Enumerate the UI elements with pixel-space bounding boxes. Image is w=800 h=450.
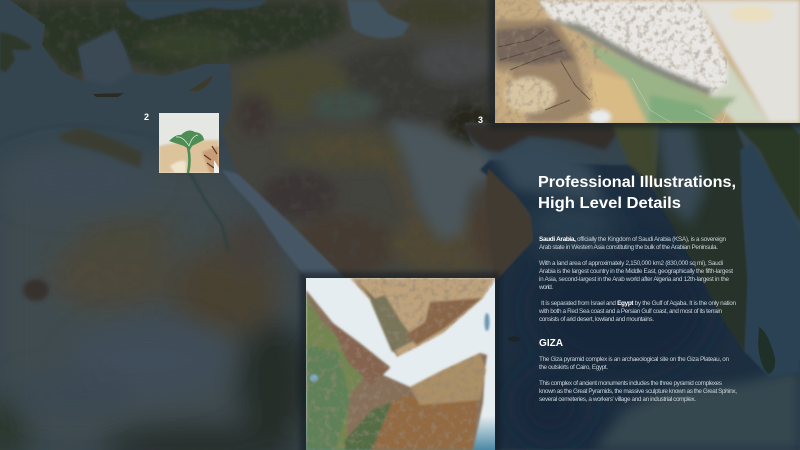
Indus olive region [612, 124, 662, 190]
text block: Saudi Arabia: consists of arid desert, lowland and mountains. [539, 316, 654, 323]
Socotra [508, 336, 520, 342]
text block: Saudi Arabia: It is separated from Israel and Egypt by the Gulf of Aqaba. It is the only nation [541, 300, 736, 307]
text block: Giza: the outskirts of Cairo, Egypt. [539, 364, 608, 371]
Cyprus [192, 77, 212, 90]
Black Sea [125, 0, 266, 20]
Sri Lanka [758, 327, 775, 374]
Arabian Sea [480, 160, 800, 450]
text block: Saudi Arabia: world. [538, 284, 553, 291]
Pakistan coast [462, 124, 625, 152]
Red Sea [222, 170, 345, 278]
Africa landmass with cloud cover [0, 150, 315, 450]
Nile valley [190, 173, 228, 250]
panel 3: Himalaya and Indus detail [489, 0, 800, 128]
text block: Giza: known as the Great Pyramids, the massive sculpture known as the Great Sphinx, [539, 388, 737, 395]
text block: Saudi Arabia: in Asia, second-largest in the Arab world after Algeria and 12th-largest in the [539, 276, 729, 283]
text block: Giza: This complex of ancient monuments includes the three pyramid complexes [539, 380, 722, 387]
Aegean and eastern Mediterranean [78, 30, 132, 85]
text block: Giza: The Giza pyramid complex is an archaeological site on the Giza Plateau, on [539, 356, 729, 363]
Bengal land [735, 124, 800, 222]
title: High Level Details [538, 195, 681, 212]
Gulf of Oman [490, 140, 605, 205]
panel 1: Gulf of Aden detail [300, 272, 500, 450]
text block: Giza: several cemeteries, a workers' village and an industrial complex. [539, 396, 696, 403]
rocky massif [23, 279, 49, 301]
text block: Saudi Arabia: Saudi Arabia, officially the Kingdom of Saudi Arabia (KSA), is a sovereign [539, 236, 726, 243]
text block: Giza [539, 356, 737, 403]
label: panel number 2: 2 [144, 112, 149, 122]
Crete [93, 93, 124, 97]
text block: Saudi Arabia: with both a Red Sea coast and a Persian Gulf coast, and most of its terrain [538, 308, 722, 315]
Middle East land [10, 0, 495, 278]
text block: Saudi Arabia [538, 236, 736, 323]
heading: Giza: GIZA [539, 338, 563, 349]
text block: Saudi Arabia: With a land area of approximately 2,150,000 km2 (830,000 sq mi), Saudi [539, 260, 723, 267]
cloud over Africa [5, 152, 228, 417]
Oman coast [485, 168, 533, 282]
Italy [0, 32, 32, 72]
rock texture on Sahara [30, 205, 310, 330]
Libyan coast [58, 128, 142, 168]
Indian peninsula [655, 124, 748, 352]
panel 2: Nile delta detail [159, 113, 219, 173]
cloud bank south of India [595, 368, 800, 450]
title [538, 174, 736, 212]
haze over west India [655, 125, 705, 225]
text block: Saudi Arabia: Arab state in Western Asia constituting the bulk of the Arabian Peninsula. [539, 244, 718, 251]
label: panel number 3: 3 [478, 115, 483, 125]
title: Professional Illustrations, [538, 174, 736, 191]
Caspian Sea [347, 0, 410, 38]
text block: Saudi Arabia: Arabia is the largest country in the Middle East, geographically the fifth-largest [539, 268, 733, 275]
haze over Persian Gulf [388, 120, 495, 240]
Bay of Bengal [740, 143, 800, 378]
